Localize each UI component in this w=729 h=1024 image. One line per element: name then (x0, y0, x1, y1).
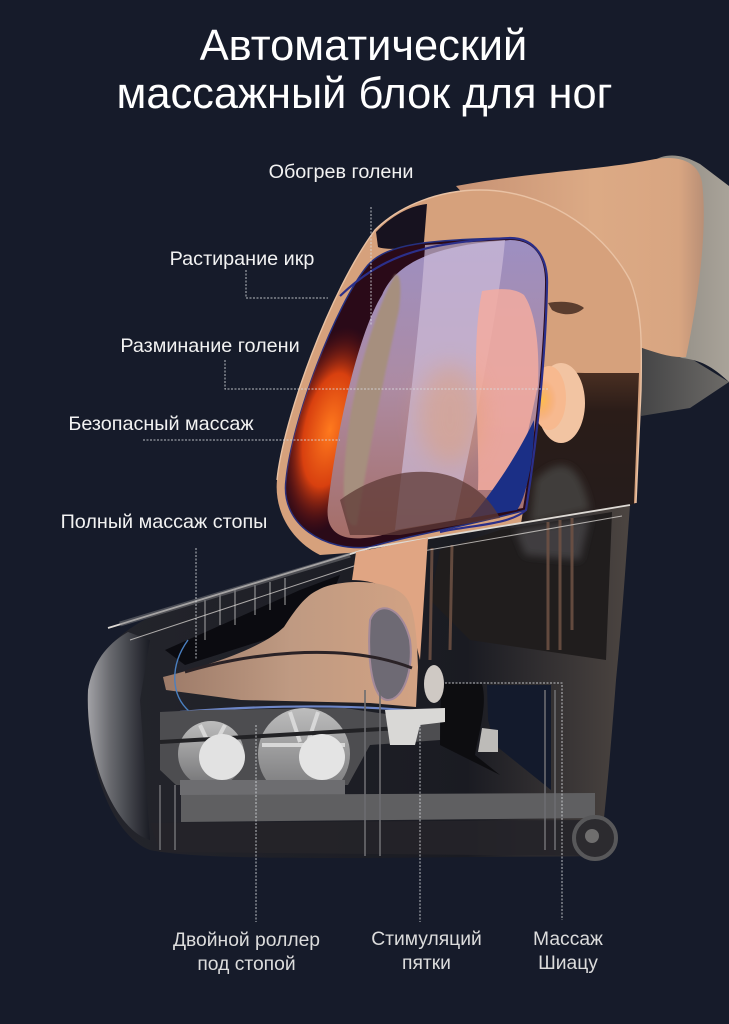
dark interior under shell (430, 512, 612, 660)
base frame bar (181, 793, 595, 822)
label: safe massage: Безопасный массаж (68, 413, 254, 435)
small white uprights under rail (205, 578, 285, 640)
lower frame details (160, 690, 555, 856)
title: массажный блок для ног (117, 70, 612, 118)
foot bands (185, 652, 412, 672)
calf window, lavender panel (328, 240, 545, 538)
bottom floor strip (150, 820, 590, 856)
wheel (574, 817, 616, 859)
dark opening right (487, 685, 551, 790)
grey calf reflection (530, 465, 590, 524)
heel cushion (369, 608, 411, 700)
black curved part (440, 683, 500, 775)
nose of device (88, 632, 150, 840)
shiatsu nub (424, 665, 444, 703)
calf window, outer dark ring (285, 238, 547, 548)
blue lower-right corner (470, 420, 534, 518)
label: full foot massage: Полный массаж стопы (61, 511, 267, 533)
title (117, 22, 612, 118)
label: double roller under foot: Двойной роллер (173, 930, 320, 951)
blue window edge (340, 238, 547, 532)
label: heel stimulation: пятки (402, 953, 451, 974)
pink light panel (476, 289, 538, 490)
knee dimple (548, 302, 584, 314)
dark lower shell (520, 372, 639, 530)
label: calf rubbing: Растирание икр (170, 248, 314, 270)
roller mechanism (160, 708, 498, 800)
brown right uprights (430, 518, 572, 660)
ankle and foot (163, 582, 418, 707)
warm centre glow (418, 365, 482, 465)
pale lavender vertical highlight (395, 240, 505, 530)
upper part of trouser leg (650, 155, 729, 382)
grey-tan inner strip (344, 275, 400, 526)
label: double roller under foot: под стопой (197, 954, 296, 975)
thigh skin (456, 158, 704, 357)
shell rim highlight (277, 190, 641, 503)
ankle skin (352, 538, 428, 660)
diagonal top rail (108, 505, 630, 640)
dark bottom fold (340, 472, 500, 535)
callout lines (143, 207, 562, 922)
grey interior patch (515, 518, 590, 560)
label: heel stimulation: Стимуляций (371, 929, 482, 950)
orange heat glow (286, 332, 362, 528)
dark region above the toes (165, 575, 340, 665)
massage nub (525, 363, 585, 443)
label: shin heating: Обогрев голени (269, 161, 413, 183)
label: shiatsu massage: Шиацу (538, 953, 598, 974)
dark window top (376, 204, 427, 249)
lower part of trouser leg (641, 348, 729, 416)
label: shiatsu massage: Массаж (533, 929, 603, 950)
label: shin kneading: Разминание голени (120, 335, 300, 357)
housing upper shell (277, 190, 641, 555)
title: Автоматический (200, 22, 527, 70)
massage device illustration (88, 155, 729, 859)
glass base body (88, 505, 630, 858)
